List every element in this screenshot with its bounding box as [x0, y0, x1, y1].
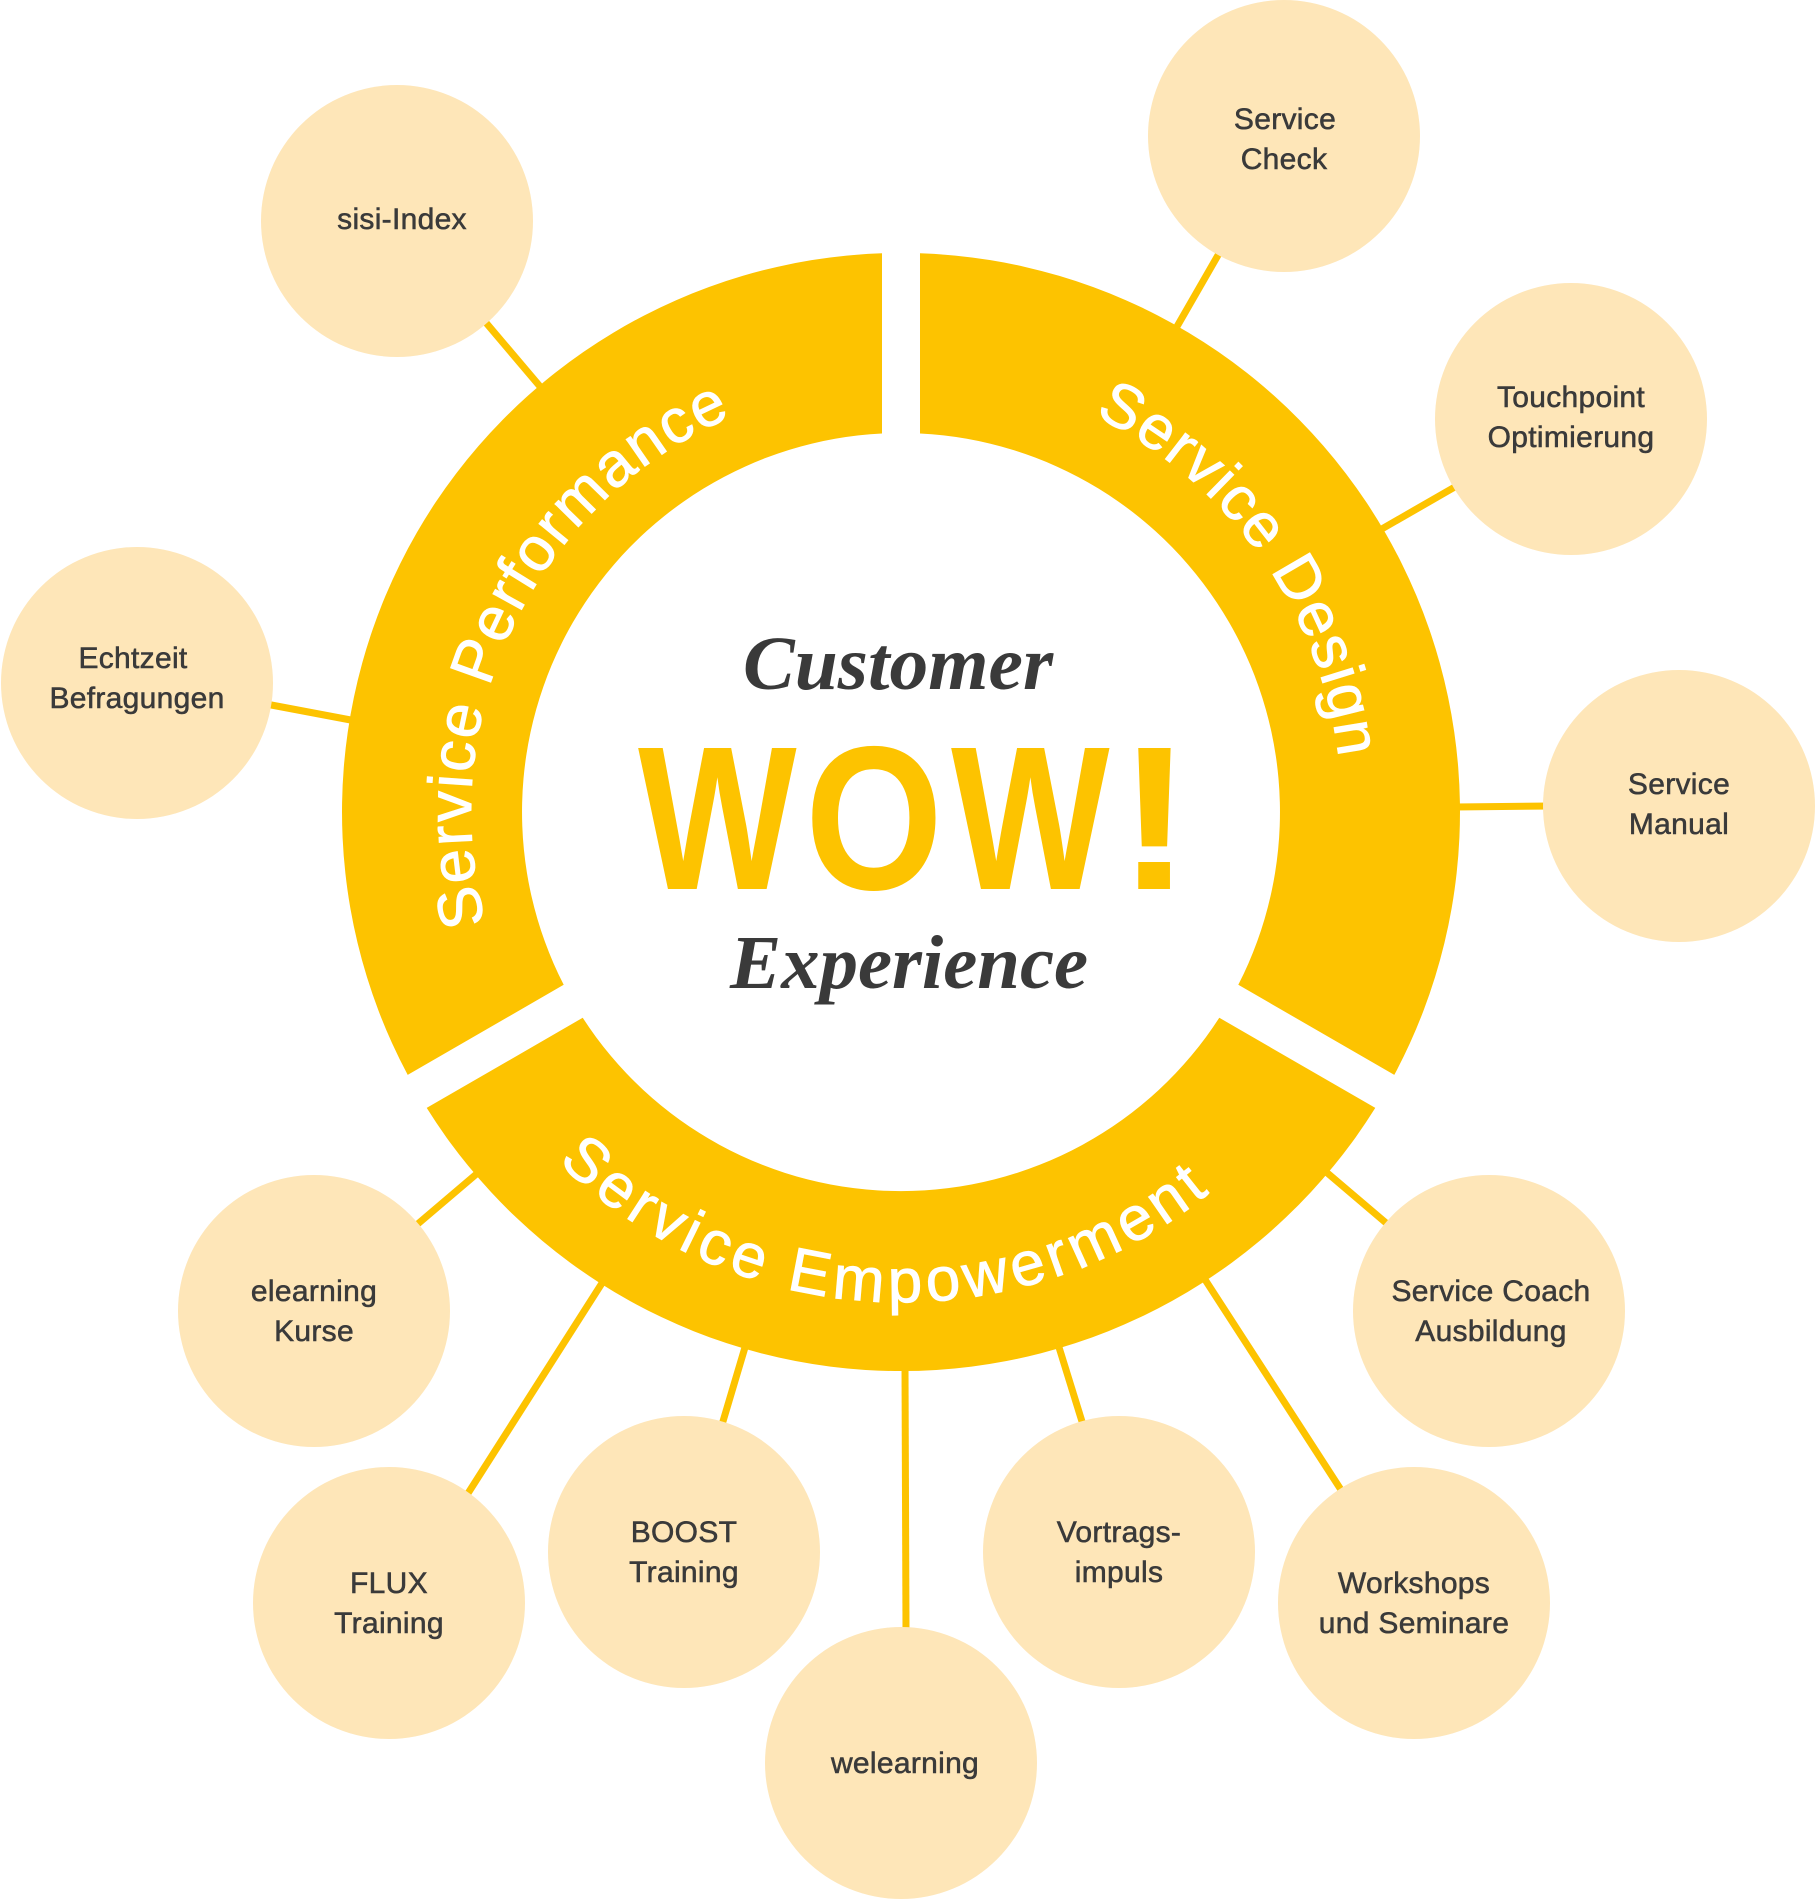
segment: Service Design: Service Design	[1100, 384, 1370, 754]
center title: !	[1117, 703, 1192, 933]
circle: BOOST Training: BOOST	[631, 1516, 737, 1549]
segment: Service Performance: Service Performance	[426, 392, 726, 926]
circle: elearning Kurse: elearning	[251, 1275, 377, 1308]
segment: Service Design	[920, 253, 1460, 1075]
segment: Service Empowerment	[426, 1018, 1376, 1371]
circle: Vortragsimpuls	[983, 1416, 1255, 1688]
circle: FLUX Training: FLUX	[350, 1567, 428, 1600]
circle: BOOST Training: Training	[629, 1556, 739, 1589]
circle: elearning Kurse	[178, 1175, 450, 1447]
circle: BOOST Training	[548, 1416, 820, 1688]
circle: Service Manual: Manual	[1629, 808, 1729, 841]
center title: O	[805, 703, 943, 933]
circle: Vortragsimpuls: Vortrags-	[1057, 1516, 1181, 1549]
center title	[638, 622, 1192, 1005]
circle: Echtzeit Befragungen: Befragungen	[49, 682, 225, 715]
segment: Service Performance	[342, 253, 882, 1075]
segment: Service Empowerment: Service Empowerment	[564, 1138, 1210, 1316]
circle: Workshops und Seminare	[1278, 1467, 1550, 1739]
circle: Touchpoint Optimierung	[1435, 283, 1707, 555]
circle: Service Manual: Service	[1628, 768, 1730, 801]
center title: W	[951, 703, 1110, 933]
circle: Echtzeit Befragungen: Echtzeit	[78, 642, 188, 675]
center title: Experience	[729, 920, 1088, 1005]
circle: Workshops und Seminare: Workshops	[1338, 1567, 1490, 1600]
circle: welearning	[765, 1627, 1037, 1899]
circle: Service Coach Ausbildung	[1353, 1175, 1625, 1447]
circle: Service Check: Service	[1234, 103, 1336, 136]
connector lines	[266, 250, 1550, 1632]
circle: elearning Kurse: Kurse	[274, 1315, 354, 1348]
center title: Customer	[743, 622, 1054, 706]
circle: Workshops und Seminare: und Seminare	[1319, 1607, 1509, 1640]
circle: Echtzeit Befragungen	[1, 547, 273, 819]
circle: sisi-Index	[261, 85, 533, 357]
circle: Vortragsimpuls: impuls	[1075, 1556, 1163, 1589]
circle: Service Coach Ausbildung: Service Coach	[1392, 1275, 1590, 1308]
circle: Touchpoint Optimierung: Optimierung	[1488, 421, 1654, 454]
circle: Service Manual	[1543, 670, 1815, 942]
center title: W	[638, 703, 797, 933]
circle: welearning: welearning	[830, 1747, 979, 1780]
circle: FLUX Training: Training	[334, 1607, 444, 1640]
circle: Service Check: Check	[1241, 143, 1328, 176]
circle: FLUX Training	[253, 1467, 525, 1739]
circle: Service Coach Ausbildung: Ausbildung	[1415, 1315, 1567, 1348]
circle: Service Check	[1148, 0, 1420, 272]
circle: Touchpoint Optimierung: Touchpoint	[1497, 381, 1645, 414]
circle: sisi-Index: sisi-Index	[337, 203, 467, 236]
